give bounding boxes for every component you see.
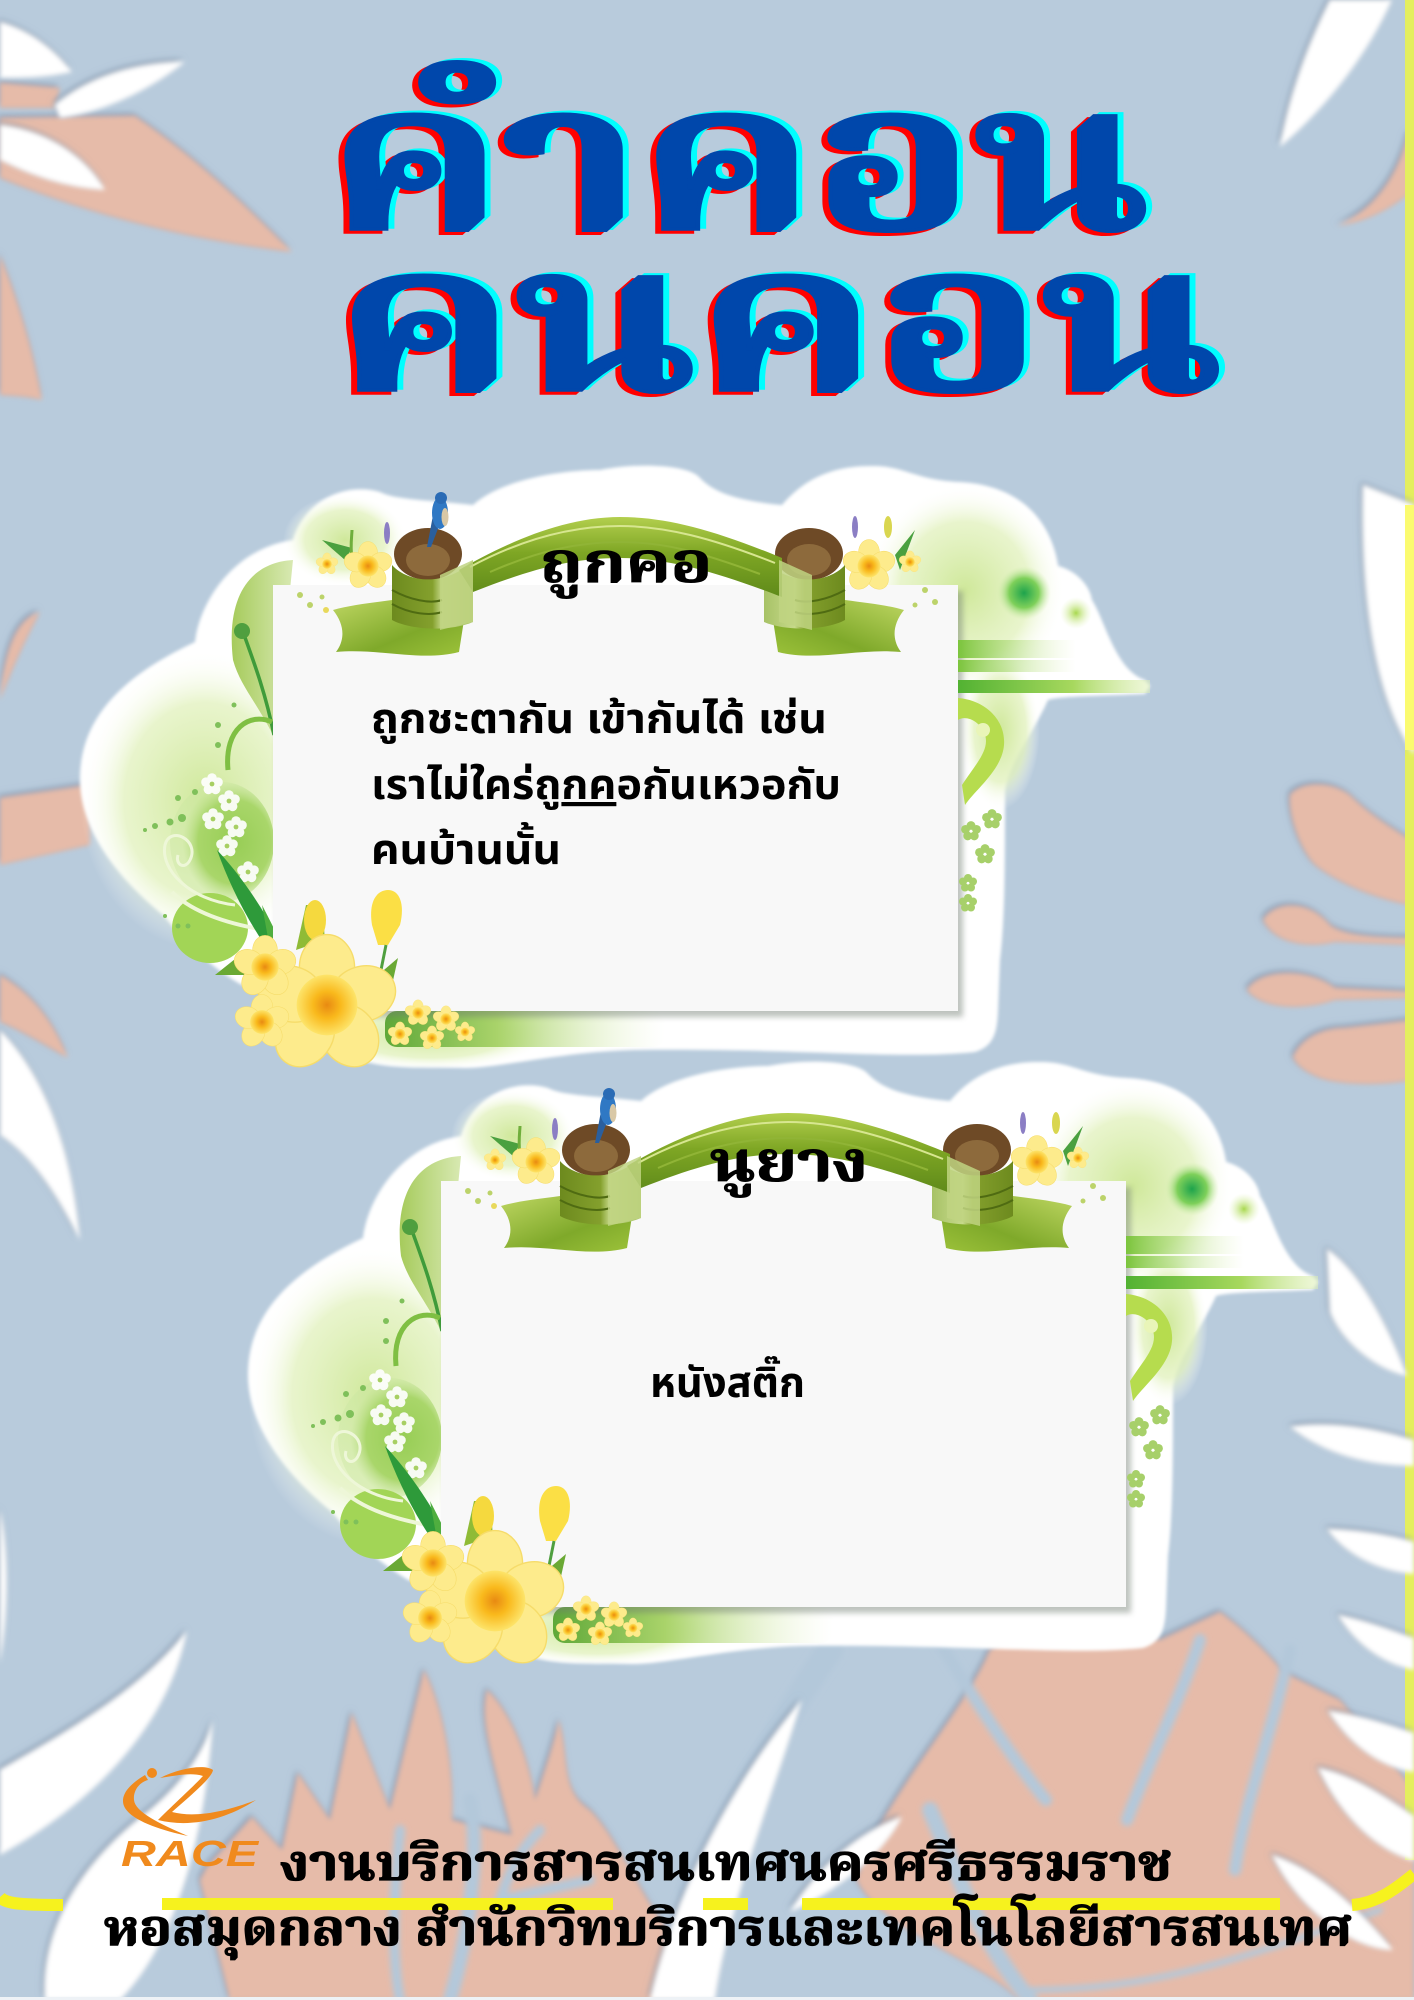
panel: นูยาง card — [248, 1062, 1318, 1674]
card illustration: cloud, paper, ribbon, flowers — [248, 1062, 1318, 1674]
panel: ถูกคอ card — [80, 466, 1150, 1078]
title — [322, 45, 1229, 438]
footer text — [104, 1835, 1352, 1959]
yellow frame line — [0, 1874, 1414, 1905]
text block: definition: ถูกชะตากัน เข้ากันได้ เช่น — [371, 695, 827, 744]
title line 2: คนคอน — [335, 208, 1223, 435]
title line 1: คำคอน — [334, 45, 1156, 272]
heading: ถูกคอ: ถูกคอ — [540, 533, 712, 598]
title line 1: คำคอน — [322, 50, 1144, 277]
text block: definition: หนังสติ๊ก — [650, 1355, 805, 1406]
title line 1: คำคอน — [328, 47, 1150, 274]
text block: definition — [371, 695, 841, 873]
card illustration: cloud, paper, ribbon, flowers — [80, 466, 1150, 1078]
logo: RACE — [121, 1767, 259, 1874]
icon: swoosh mark — [123, 1767, 256, 1836]
heading: นูยาง: นูยาง — [710, 1132, 868, 1197]
text block: definition: คนบ้านนั้น — [371, 821, 561, 873]
footer line 2: หอสมุดกลาง สำนักวิทบริการและเทคโนโลยีสารสนเทศ — [104, 1894, 1352, 1959]
footer line 1: งานบริการสารสนเทศนครศรีธรรมราช — [280, 1835, 1172, 1891]
title line 2: คนคอน — [329, 211, 1217, 438]
logo wordmark: RACE — [121, 1833, 259, 1874]
blue veins in salmon hand — [394, 1640, 1380, 2000]
text block: definition: เราไม่ใคร่ถูกคอกันเหวอกับ — [371, 761, 841, 810]
title line 2: คนคอน — [341, 206, 1229, 433]
